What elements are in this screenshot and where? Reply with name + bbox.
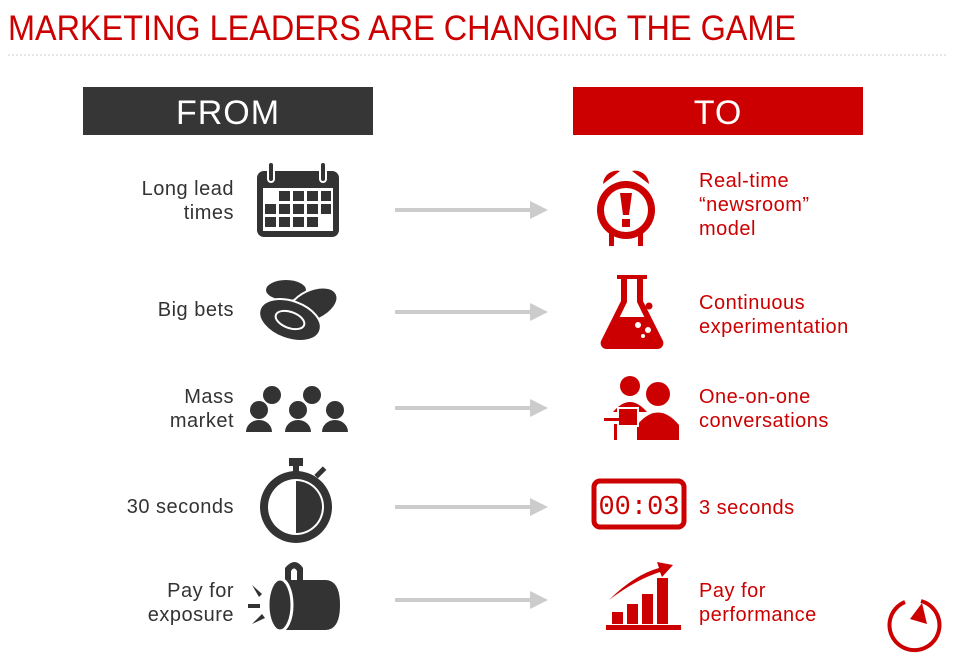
- icon: spotlight: [248, 562, 340, 631]
- left labels: market: [170, 410, 234, 432]
- right labels: 3 seconds: [699, 497, 795, 519]
- right labels: Continuous: [699, 292, 805, 314]
- left labels: Big bets: [158, 299, 234, 321]
- left labels: times: [184, 202, 234, 224]
- right labels: [699, 170, 849, 626]
- right labels: performance: [699, 604, 817, 626]
- icon: stopwatch: [260, 458, 332, 543]
- left labels: Long lead: [142, 178, 234, 200]
- right labels: model: [699, 218, 756, 240]
- title: MARKETING LEADERS ARE CHANGING THE GAME: [8, 9, 796, 48]
- logo: [889, 601, 939, 650]
- header: TO: TO: [694, 94, 742, 132]
- header: FROM: FROM: [176, 94, 280, 132]
- icon: crowd: [246, 386, 348, 432]
- icon: calendar: [257, 162, 339, 237]
- icon: alarm clock: [597, 171, 655, 246]
- icon: poker chips: [253, 279, 343, 349]
- arrows: [395, 201, 548, 609]
- header: FROM: [83, 87, 373, 135]
- left labels: [127, 178, 234, 626]
- right labels: One-on-one: [699, 386, 811, 408]
- header: TO: [573, 87, 863, 135]
- left labels: 30 seconds: [127, 496, 234, 518]
- icon: flask: [601, 275, 663, 349]
- right labels: conversations: [699, 410, 829, 432]
- icon: conversation: [604, 376, 679, 440]
- left labels: Mass: [184, 386, 234, 408]
- right labels: “newsroom”: [699, 194, 810, 216]
- right labels: Real-time: [699, 170, 789, 192]
- left labels: Pay for: [167, 580, 234, 602]
- left labels: exposure: [148, 604, 234, 626]
- icon: performance chart: [606, 562, 681, 630]
- right labels: experimentation: [699, 316, 849, 338]
- right labels: Pay for: [699, 580, 766, 602]
- icon: digital timer: 00:03: [598, 493, 680, 523]
- icon: digital timer: [594, 481, 684, 527]
